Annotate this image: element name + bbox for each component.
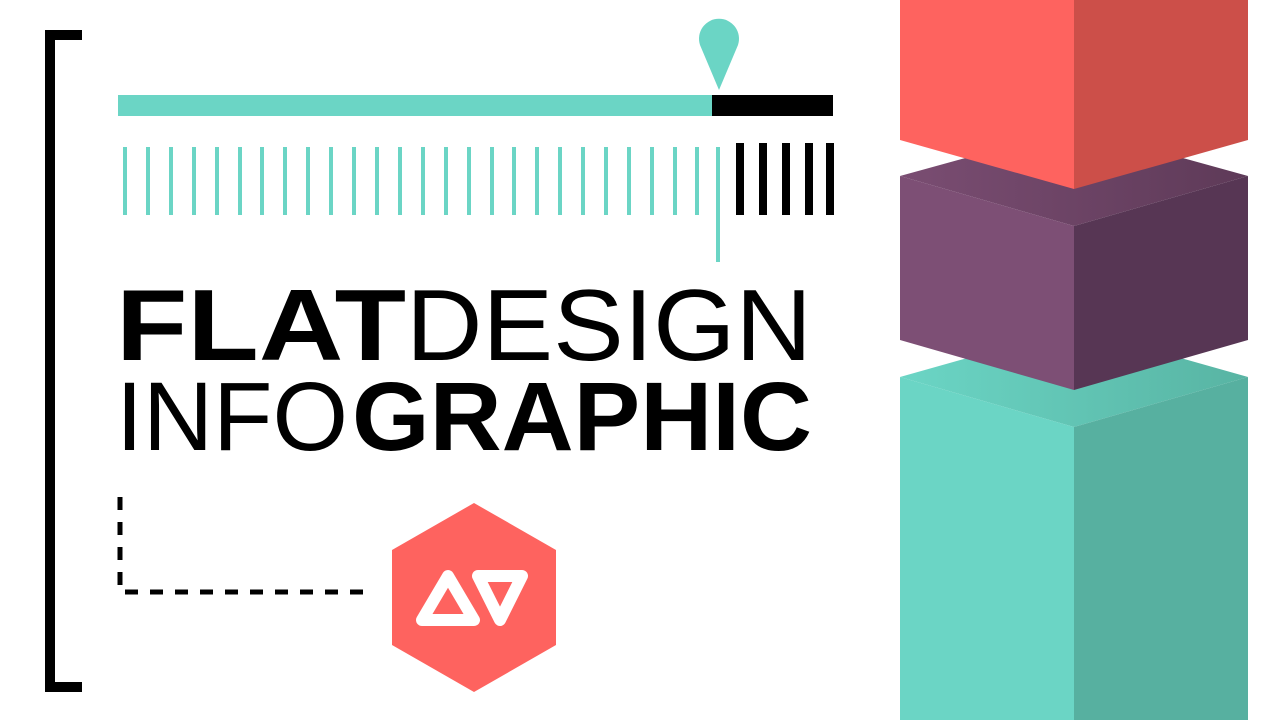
dashed connector bbox=[120, 497, 372, 592]
title bbox=[116, 270, 812, 471]
progress bar bbox=[118, 95, 833, 116]
title: DESIGN bbox=[406, 270, 812, 382]
title: FLAT bbox=[116, 270, 406, 382]
cube: teal bbox=[900, 328, 1248, 720]
cube: purple bbox=[900, 128, 1248, 390]
title: INFO bbox=[116, 362, 348, 471]
cubes bbox=[900, 0, 1248, 720]
tick scale bbox=[123, 143, 834, 262]
title: GRAPHIC bbox=[352, 362, 812, 471]
cube: red bbox=[900, 0, 1248, 189]
bracket bbox=[50, 35, 82, 687]
logo hexagon bbox=[392, 503, 556, 692]
icon: location pin bbox=[699, 19, 739, 90]
